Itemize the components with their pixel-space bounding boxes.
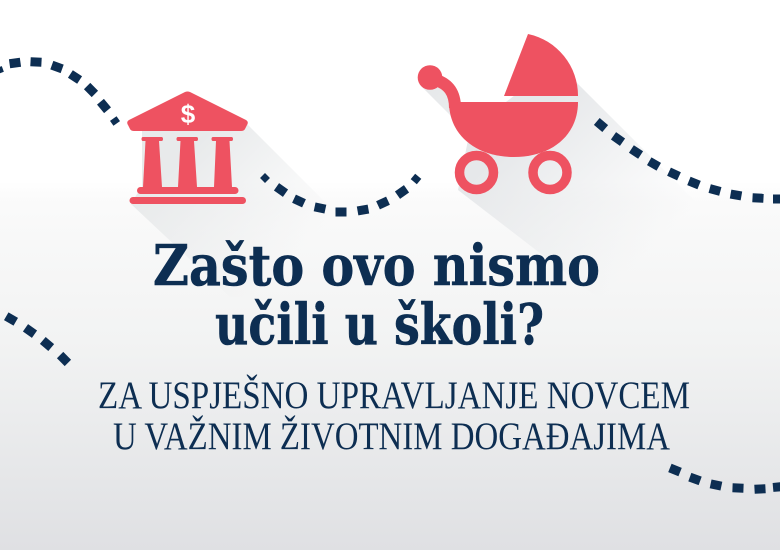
pram right wheel	[533, 156, 567, 190]
icon: bank	[127, 92, 248, 204]
dashed line: bottom right	[668, 464, 780, 494]
icon: dollar sign: $	[181, 99, 196, 129]
icon: pram	[418, 34, 578, 190]
dashed line: top left	[0, 57, 120, 126]
dashed line: middle	[260, 173, 421, 216]
pram canopy	[504, 34, 578, 96]
title: Zašto ovo nismo	[153, 233, 600, 299]
subtitle: ZA USPJEŠNO UPRAVLJANJE NOVCEM	[98, 373, 690, 417]
dashed line: right	[594, 118, 780, 204]
pram handle knob	[418, 65, 442, 90]
bank long shadow	[131, 124, 420, 297]
title: učili u školi?	[215, 292, 544, 358]
subtitle	[98, 373, 690, 458]
pram long shadow	[458, 60, 780, 330]
pram left wheel	[460, 156, 494, 190]
pram handle shadow	[422, 72, 474, 117]
dashed line: lower left	[4, 312, 71, 366]
pram handle	[436, 80, 455, 108]
pram body	[449, 102, 578, 157]
subtitle: U VAŽNIM ŽIVOTNIM DOGAĐAJIMA	[113, 414, 670, 458]
title	[153, 233, 600, 358]
